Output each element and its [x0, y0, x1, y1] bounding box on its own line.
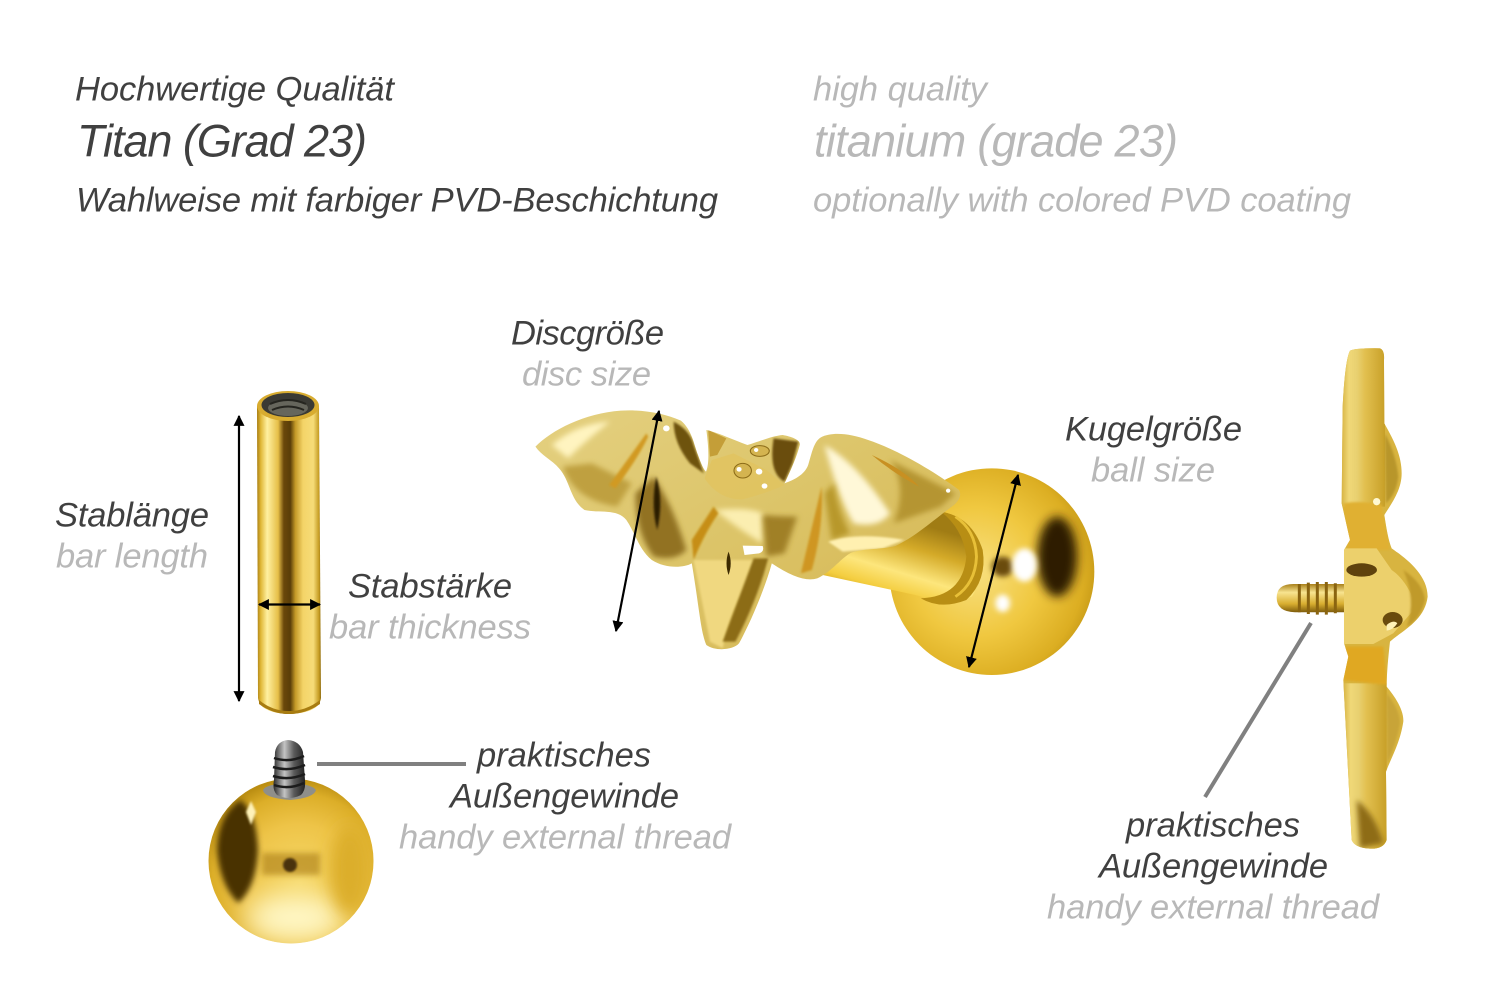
label: bar thickness: bar thickness — [329, 608, 531, 646]
arrow: ball size — [969, 475, 1018, 667]
label: disc size — [511, 314, 664, 394]
label: external thread on side view: praktisches — [1125, 806, 1300, 844]
product: bat side view — [1277, 347, 1428, 850]
heading block: English: titanium (grade 23) — [814, 116, 1178, 166]
stem — [823, 512, 982, 600]
heading block: English: optionally with colored PVD coating — [813, 182, 1351, 220]
label: bar thickness: Stabstärke — [348, 568, 512, 606]
label: bar thickness — [329, 568, 531, 646]
label: external thread on side view: handy external thread — [1047, 888, 1381, 926]
label: ball size — [1065, 410, 1242, 490]
heading block: English: high quality — [813, 70, 989, 108]
label: external thread on ball: Außengewinde — [448, 778, 679, 816]
label: disc size: Discgröße — [511, 314, 664, 352]
heading block: German — [75, 70, 718, 220]
label: bar length — [55, 496, 209, 576]
bat body — [535, 410, 960, 649]
bat side silhouette — [1342, 348, 1428, 849]
arrow: bar length — [238, 416, 240, 701]
label: ball size: Kugelgröße — [1065, 410, 1242, 448]
arrow: bar thickness — [259, 603, 320, 606]
ball — [889, 468, 1094, 675]
label: external thread on ball: praktisches — [476, 736, 651, 774]
threaded pin — [1277, 584, 1344, 612]
heading block: English — [813, 70, 1351, 220]
pointer line: side view thread — [1205, 623, 1311, 797]
label: ball size: ball size — [1091, 452, 1215, 490]
product: threaded bar — [257, 391, 321, 714]
product: threaded ball — [208, 740, 374, 944]
label: external thread on ball: handy external thread — [399, 818, 733, 856]
arrow: disc size — [616, 411, 659, 631]
label: external thread on ball — [399, 736, 733, 856]
label: bar length: bar length — [56, 538, 208, 576]
pointer line: ball thread — [317, 762, 466, 766]
label: external thread on side view: Außengewinde — [1097, 848, 1328, 886]
label: external thread on side view — [1047, 806, 1381, 926]
product: bat barbell front view — [535, 410, 1094, 675]
heading block: German: Hochwertige Qualität — [75, 70, 395, 108]
label: bar length: Stablänge — [55, 496, 209, 534]
heading block: German: Wahlweise mit farbiger PVD-Beschichtung — [76, 182, 718, 220]
bat shading — [552, 422, 955, 648]
heading block: German: Titan (Grad 23) — [77, 116, 367, 166]
label: disc size: disc size — [522, 356, 651, 394]
